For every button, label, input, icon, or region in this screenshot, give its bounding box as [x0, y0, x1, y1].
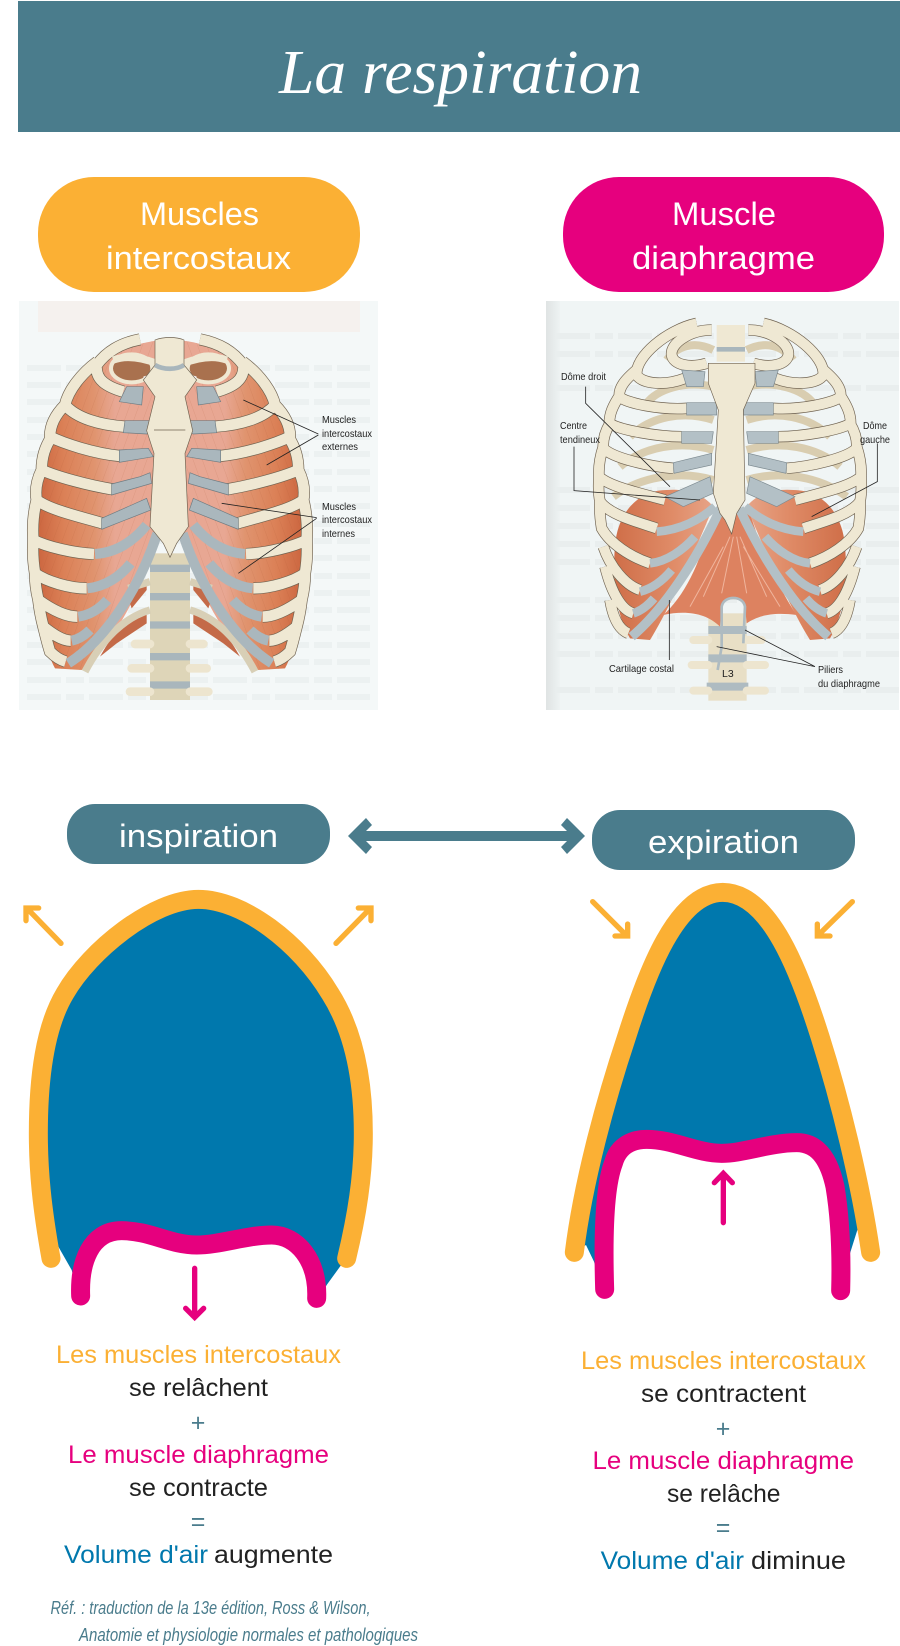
text block: inspiration: Le muscle diaphragme: [68, 1441, 329, 1469]
pill: inspiration: inspiration: [119, 818, 278, 854]
figure: rib cage with diaphragm: [546, 301, 899, 710]
reference note: Anatomie et physiologie normales et pathologiques: [78, 1625, 418, 1645]
labels: diaphragm anatomy: Dôme: [863, 420, 887, 432]
pill: muscle diaphragme: [563, 177, 884, 292]
text block: expiration: Les muscles intercostaux: [581, 1347, 866, 1375]
labels: diaphragm anatomy: L3: [722, 668, 734, 680]
intercostal muscles: [38, 899, 363, 1258]
spine: [692, 325, 765, 701]
labels: diaphragm anatomy: du diaphragme: [818, 678, 880, 690]
labels: diaphragm anatomy: tendineux: [560, 434, 601, 446]
labels: diaphragm anatomy: Cartilage costal: [609, 663, 674, 675]
pill: expiration: [592, 810, 855, 870]
figure: rib cage with intercostal muscles: [19, 301, 378, 710]
diagram: expiration thorax: [574, 892, 871, 1317]
text block: inspiration: Volume d'air: [64, 1541, 208, 1569]
diaphragm: [81, 1231, 317, 1298]
labels: diaphragm anatomy: gauche: [860, 434, 890, 446]
reference note: Réf. : traduction de la 13e édition, Ross & Wilson,: [50, 1598, 370, 1618]
pill: muscles intercostaux: Muscles: [140, 196, 259, 232]
label: muscles intercostaux internes: intercostaux: [322, 514, 373, 526]
text block: inspiration: se contracte: [129, 1474, 268, 1502]
text block: inspiration: se relâchent: [129, 1374, 268, 1402]
pill: muscles intercostaux: [38, 177, 360, 292]
title banner: [18, 1, 900, 132]
text block: inspiration: augmente: [214, 1541, 333, 1569]
pill: muscles intercostaux: intercostaux: [106, 240, 291, 276]
reference note: [50, 1598, 418, 1645]
text block: inspiration: =: [191, 1508, 205, 1536]
text block: expiration: Volume d'air: [601, 1547, 744, 1575]
labels: diaphragm anatomy: [560, 371, 890, 690]
air volume: [574, 892, 871, 1297]
text block: expiration: se relâche: [667, 1480, 780, 1508]
label: muscles intercostaux externes: externes: [322, 441, 358, 453]
text block: inspiration: [56, 1341, 341, 1569]
spine: [130, 553, 208, 700]
pill: inspiration: [67, 804, 330, 864]
text block: expiration: [581, 1347, 866, 1575]
text block: inspiration: +: [191, 1409, 205, 1437]
text block: expiration: se contractent: [641, 1380, 806, 1408]
arrow: ribs in left: [593, 902, 628, 936]
arrow: diaphragm up: [714, 1173, 732, 1223]
labels: diaphragm anatomy: Piliers: [818, 664, 843, 676]
label: muscles intercostaux internes: Muscles: [322, 501, 356, 513]
arrow: diaphragm down: [186, 1268, 204, 1317]
label: muscles intercostaux externes: Muscles: [322, 414, 356, 426]
arch interior: [604, 1139, 841, 1317]
leader lines: [574, 387, 877, 667]
pill: muscle diaphragme: diaphragme: [632, 240, 815, 276]
text block: expiration: +: [716, 1415, 730, 1443]
arrow: ribs in right: [817, 902, 852, 936]
label: muscles intercostaux externes: [322, 414, 373, 453]
sternum: [143, 337, 197, 557]
text block: inspiration: Les muscles intercostaux: [56, 1341, 341, 1369]
arch interior: [81, 1231, 317, 1323]
air volume: [38, 899, 363, 1303]
diaphragm: [604, 1139, 841, 1291]
title: La respiration: [278, 39, 642, 107]
pill: muscle diaphragme: Muscle: [672, 196, 776, 232]
diagram: inspiration thorax: [26, 899, 371, 1323]
diaphragm central muscle: [663, 510, 797, 670]
leader lines: [222, 400, 318, 573]
text block: expiration: =: [716, 1514, 730, 1542]
pill: expiration: expiration: [648, 824, 799, 860]
labels: diaphragm anatomy: Dôme droit: [561, 371, 606, 383]
arrow: ribs out left: [26, 908, 61, 943]
label: muscles intercostaux internes: [322, 501, 373, 540]
sternum: [708, 363, 755, 534]
label: muscles intercostaux externes: intercostaux: [322, 428, 373, 440]
double arrow: [348, 818, 585, 854]
label: muscles intercostaux internes: internes: [322, 528, 355, 540]
text block: expiration: Le muscle diaphragme: [592, 1447, 854, 1475]
text block: expiration: diminue: [751, 1547, 846, 1575]
intercostal muscles: [574, 892, 871, 1252]
arrow: ribs out right: [336, 908, 371, 943]
labels: diaphragm anatomy: Centre: [560, 420, 587, 432]
